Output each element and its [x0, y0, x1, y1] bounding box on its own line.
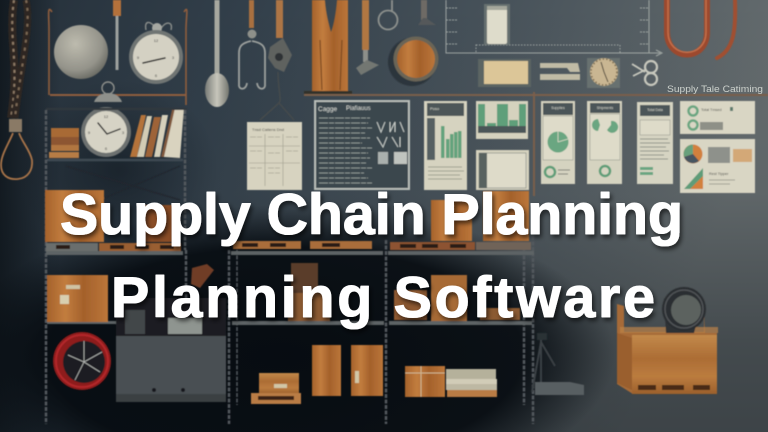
- panel: barcode sheet: [680, 101, 755, 134]
- top shelf frame: [46, 109, 187, 200]
- panel: green bar chart sheet: Poso: [430, 106, 440, 111]
- icon: red cable reel: [53, 332, 111, 390]
- panel: green bar chart sheet: [424, 101, 467, 190]
- chart: mixed dashboard sheet: [680, 139, 755, 193]
- panel: text report sheet: [637, 102, 673, 184]
- icon: copper U hook: [667, 0, 707, 54]
- icon: wall clock: 12: [154, 38, 159, 43]
- icon: spoon: [205, 0, 229, 107]
- chart: split pie sheet: [587, 101, 622, 184]
- icon: hanging rope with ring: [1, 0, 32, 179]
- icon: tape block: [478, 59, 531, 87]
- chart: pie sheet: Supplies: [551, 106, 565, 110]
- chart: pie sheet: [541, 101, 575, 184]
- shelf uprights: [46, 110, 533, 424]
- icon: stone ball: [54, 25, 108, 79]
- icon: desk clock: 6: [105, 146, 108, 151]
- icon: camera lens: [662, 287, 706, 333]
- icon: steel cabinet: [116, 298, 226, 402]
- chart: split pie sheet: Shipments: [597, 106, 614, 110]
- icon: wooden Y form: [304, 0, 352, 94]
- title line 1: Supply Chain Planning: [60, 183, 683, 247]
- icon: metal clamp: [540, 63, 580, 80]
- icon: knife: [113, 0, 121, 70]
- hanging rail: [304, 92, 768, 196]
- icon: phone: [484, 4, 510, 45]
- icon: small crate on pallet: [251, 373, 301, 404]
- title: [60, 183, 683, 330]
- icon: wall clock: 3: [172, 55, 175, 60]
- title line 2: Planning Software: [111, 266, 655, 330]
- icon: kettle: [191, 264, 214, 288]
- shelf boards: [46, 251, 534, 325]
- icon: cloth stack on pallet: [446, 369, 497, 397]
- icon: desk clock: 3: [122, 130, 125, 135]
- panel: barcode sheet: Total Tmsed: [701, 108, 722, 112]
- icon: tied crate: [405, 366, 445, 397]
- panel: dark specification sheet: Piafiauus: [346, 106, 371, 112]
- chart: green column panel: [476, 101, 528, 139]
- icon: scraper tool: [356, 0, 379, 75]
- icon: wood crate with lens: [617, 287, 718, 394]
- icon: tall crates: [312, 345, 383, 396]
- icon: books: [130, 108, 184, 158]
- icon: desk clock: [81, 82, 131, 157]
- icon: wall clock: 6: [155, 73, 158, 78]
- chart: mixed dashboard sheet: Rest Tipper: [709, 172, 729, 176]
- icon: upright books on shelf: [288, 263, 520, 321]
- icon: ring tool: [378, 0, 398, 30]
- panel: calendar sheet: Tnsd Catlens Dnd: [252, 127, 284, 132]
- wall caption: Supply Tale Catiming: [667, 84, 763, 95]
- box: center wood crates: [145, 191, 529, 242]
- wall-hung tools, top row: [1, 0, 735, 179]
- panel: pinned charts and documents: [247, 100, 755, 193]
- icon: gear tool on wire: [260, 0, 294, 120]
- icon: desk clock: 12: [104, 114, 109, 119]
- panel: calendar sheet: [247, 122, 302, 190]
- icon: hook tongs: [239, 0, 265, 89]
- icon: round wooden tray: [388, 36, 438, 86]
- pallets row: [46, 241, 531, 251]
- panel: text report sheet: Total Data: [647, 108, 663, 112]
- icon: small gauge: [587, 58, 620, 88]
- icon: hammer tool: [418, 0, 436, 25]
- panel: metal shelving: [45, 108, 584, 424]
- chart: ruler grid diagram: [446, 0, 662, 56]
- icon: wire hanger frame: [49, 9, 187, 105]
- box: large wood crate: [45, 190, 104, 242]
- icon: tripod and device: [532, 333, 584, 395]
- icon: wall clock: 9: [137, 55, 140, 60]
- panel: dark specification sheet: [314, 100, 410, 190]
- icon: desk clock: 9: [88, 130, 91, 135]
- panel: blank table sheet: [476, 150, 529, 190]
- icon: scissors: [632, 61, 657, 85]
- icon: wall clock: [129, 22, 183, 84]
- icon: copper J hook: [717, 0, 735, 58]
- panel: dark specification sheet: Cagge: [318, 106, 338, 113]
- icon: wood stack on top shelf: [49, 128, 79, 158]
- icon: shipping box: [47, 275, 108, 322]
